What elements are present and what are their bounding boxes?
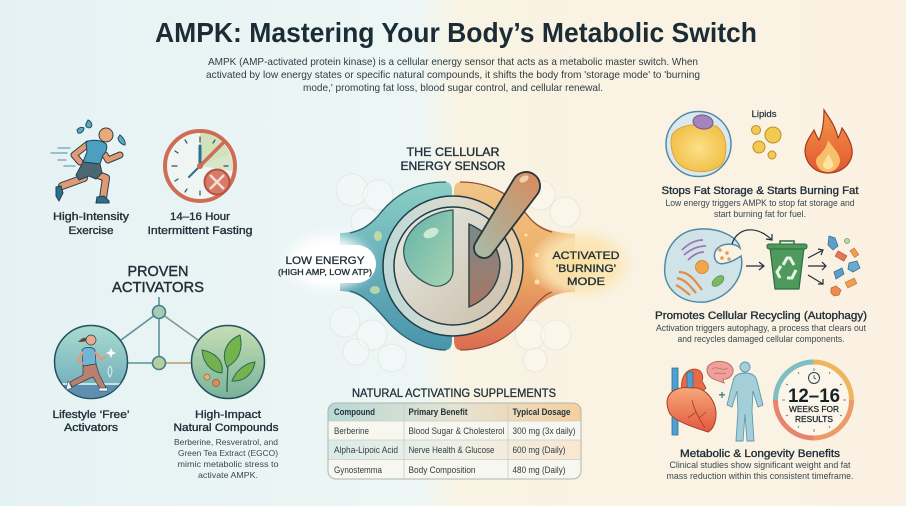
right D segment xyxy=(469,224,500,307)
speckles xyxy=(370,231,382,294)
heading: proven activators: ACTIVATORS xyxy=(112,280,204,296)
icon: heart xyxy=(667,368,716,435)
lever xyxy=(474,172,540,258)
supplements table: Gynostemma xyxy=(334,465,382,475)
icon: human body xyxy=(727,362,763,441)
text: natural compounds description: mimic metabolic stress to xyxy=(178,459,279,469)
icon: fat cell xyxy=(666,112,731,176)
inner dial xyxy=(394,207,512,325)
label: high-impact natural compounds: High-Impact xyxy=(195,409,261,421)
supplements table: Compound xyxy=(334,407,375,417)
results ring xyxy=(776,362,852,438)
plus sign: + xyxy=(718,388,726,402)
supplements table xyxy=(328,403,581,479)
label: low energy xyxy=(278,255,372,277)
supplements table: 300 mg (3x daily) xyxy=(512,426,576,436)
text: natural compounds description xyxy=(174,437,279,480)
label: the cellular energy sensor: ENERGY SENSOR xyxy=(400,160,506,173)
heading: metabolic benefits: Metabolic & Longevity Benefits xyxy=(680,448,841,460)
heading: stops fat storage: Stops Fat Storage & Starts Burning Fat xyxy=(662,185,858,197)
supplements table: Body Composition xyxy=(408,465,476,475)
label: low energy: LOW ENERGY xyxy=(286,255,365,267)
text: fat description xyxy=(666,198,855,219)
intro text xyxy=(206,57,700,94)
icon: recycling bin xyxy=(767,241,807,289)
intro text: activated by low energy states or specific natural compounds, it shifts the body from 'storage mode' to 'burning xyxy=(206,70,700,81)
ring text: 12–16 xyxy=(788,386,840,407)
label: lipids: Lipids xyxy=(752,109,777,119)
pill behind low energy xyxy=(288,236,368,288)
text: natural compounds description: Green Tea Extract (EGCO) xyxy=(178,448,278,458)
left bean xyxy=(404,210,453,286)
label: 14–16 Hour Intermittent Fasting: 14–16 Hour xyxy=(170,211,230,223)
icon: recycled fragments xyxy=(828,236,860,296)
icon: fasting clock xyxy=(165,131,235,201)
icon: runner high-intensity exercise xyxy=(51,120,125,203)
icon: lifestyle activators circle xyxy=(54,326,128,400)
text: natural compounds description: Berberine, Resveratrol, and xyxy=(174,437,278,447)
label: High-Intensity Exercise: High-Intensity xyxy=(53,211,130,223)
text: metabolic description: mass reduction within this consistent timeframe. xyxy=(666,471,854,481)
heading: proven activators: PROVEN xyxy=(128,264,188,280)
ring text: WEEKS FOR xyxy=(789,405,839,414)
label: high-impact natural compounds: Natural Compounds xyxy=(174,422,279,434)
label: high-impact natural compounds xyxy=(174,409,279,434)
text: metabolic description: Clinical studies show significant weight and fat xyxy=(670,460,851,470)
text: metabolic description xyxy=(666,460,854,481)
icon: lipids xyxy=(752,109,781,159)
arrow: curved into bin xyxy=(732,230,772,244)
heading: autophagy: Promotes Cellular Recycling (Autophagy) xyxy=(655,310,867,322)
arrow: cell to bin xyxy=(746,262,764,270)
label: High-Intensity Exercise: Exercise xyxy=(68,225,114,237)
text: fat description: start burning fat for fuel. xyxy=(714,209,806,219)
central AMPK switch xyxy=(288,172,636,350)
label: activated burning mode: MODE xyxy=(567,276,605,288)
label: the cellular energy sensor xyxy=(400,146,506,173)
activator connector network xyxy=(121,297,198,370)
heading: proven activators xyxy=(112,264,204,296)
label: 14–16 Hour Intermittent Fasting xyxy=(148,211,252,237)
background: faint cell outlines xyxy=(330,174,580,372)
text: autophagy description: Activation triggers autophagy, a process that clears out xyxy=(656,323,867,333)
text: autophagy description xyxy=(656,323,867,344)
text: fat description: Low energy triggers AMPK to stop fat storage and xyxy=(666,198,855,208)
glow: burning mode xyxy=(528,226,636,302)
text: autophagy description: and recycles damaged cellular components. xyxy=(678,334,844,344)
label: 14–16 Hour Intermittent Fasting: Intermittent Fasting xyxy=(148,225,252,237)
table heading: NATURAL ACTIVATING SUPPLEMENTS xyxy=(352,386,556,400)
supplements table: 480 mg (Daily) xyxy=(512,465,566,475)
ring text xyxy=(788,386,840,424)
label: lifestyle free activators: Lifestyle ‘Free’ xyxy=(52,409,130,421)
text: natural compounds description: activate AMPK. xyxy=(198,470,258,480)
band: burning side xyxy=(454,182,575,350)
label: lifestyle free activators: Activators xyxy=(64,422,119,434)
outer ring xyxy=(383,196,523,336)
supplements table: Nerve Health & Glucose xyxy=(408,445,495,455)
intro text: mode,' promoting fat loss, blood sugar control, and cellular renewal. xyxy=(303,83,603,94)
supplements table: Berberine xyxy=(334,426,369,436)
supplements table: Blood Sugar & Cholesterol xyxy=(408,426,505,436)
label: activated burning mode xyxy=(552,250,620,288)
icon: cell with autophagy opening xyxy=(665,229,742,302)
label: low energy: (HIGH AMP, LOW ATP) xyxy=(278,268,372,277)
supplements table: 600 mg (Daily) xyxy=(512,445,566,455)
intro text: AMPK (AMP-activated protein kinase) is a cellular energy sensor that acts as a metabolic master switch. When xyxy=(208,57,698,68)
icon: flame xyxy=(805,110,852,173)
icon: natural compounds leaf circle xyxy=(192,326,264,398)
title: AMPK: Mastering Your Body’s Metabolic Switch xyxy=(155,17,757,48)
icon: brain xyxy=(707,361,733,383)
label: lifestyle free activators xyxy=(52,409,130,434)
label: activated burning mode: ACTIVATED xyxy=(552,250,620,262)
label: High-Intensity Exercise xyxy=(53,211,130,237)
label: the cellular energy sensor: THE CELLULAR xyxy=(406,146,500,159)
supplements table: Typical Dosage xyxy=(512,407,571,417)
ring text: RESULTS xyxy=(795,415,834,424)
arrows: bin to fragments xyxy=(808,249,826,284)
supplements table: Primary Benefit xyxy=(408,407,468,417)
label: activated burning mode: 'BURNING' xyxy=(556,263,616,275)
band: low energy side xyxy=(340,182,452,350)
supplements table: Alpha-Lipoic Acid xyxy=(334,445,398,455)
